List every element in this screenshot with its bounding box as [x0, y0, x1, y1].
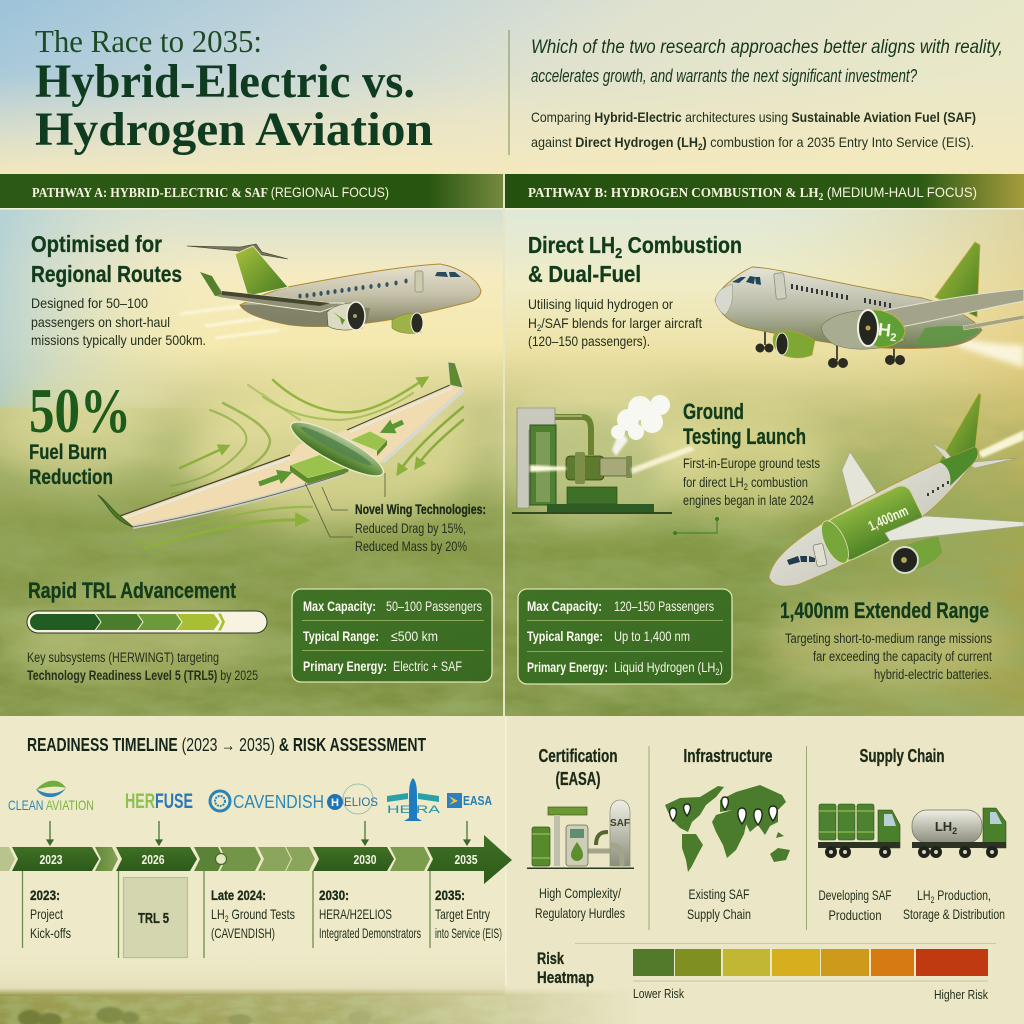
connector: [674, 518, 718, 534]
spec table: pathway B: ): [719, 659, 723, 675]
milestone: 2030: 2030:: [319, 887, 349, 903]
logo: clean aviation: CLEAN AVIATION: [8, 797, 94, 813]
icon: SAF fuel station: [527, 800, 634, 869]
heading: ground testing launch: Testing Launch: [683, 424, 806, 449]
text: ground testing description: engines began in late 2024: [683, 493, 814, 508]
section header: pathway A: [0, 174, 503, 210]
title: [35, 23, 433, 156]
research question: [531, 37, 1003, 86]
text: ground testing description: for direct LH: [683, 475, 757, 490]
icon: SAF barrel truck: [818, 804, 900, 858]
text: regional description: missions typically under 500km.: [31, 332, 206, 348]
heading: direct LH2 combustion: Combustion: [622, 232, 742, 258]
column: certification: (EASA): [556, 769, 601, 789]
heading: optimised for regional routes: Regional Routes: [31, 261, 182, 287]
section header: pathway B: 2: [819, 192, 823, 203]
column: infrastructure: Infrastructure: [684, 746, 772, 766]
text: regional description: Designed for 50–100: [31, 295, 148, 311]
milestone: 2023: [30, 887, 71, 941]
milestone: 2023: Kick-offs: [30, 925, 71, 941]
glow behind text: [0, 375, 1010, 687]
section header: pathway A: PATHWAY A: HYBRID-ELECTRIC & SAF (REGIONAL FOCUS): [32, 184, 389, 201]
illustration: regional aircraft: [180, 244, 481, 338]
logo: clean aviation: [8, 781, 94, 813]
text: hydrogen description: (120–150 passengers).: [528, 333, 650, 349]
spec table: pathway A: Typical Range:: [303, 628, 379, 644]
risk heatmap: Heatmap: [537, 968, 594, 987]
panel background: lower left haze: [0, 716, 505, 1024]
column: supply chain: Supply Chain: [860, 746, 944, 766]
spec table: pathway A: 50–100 Passengers: [386, 598, 482, 614]
illustration: ground test rig: [512, 395, 695, 530]
spec table: pathway B: 120–150 Passengers: [614, 598, 714, 614]
illustration: hydrogen airliner: [715, 242, 1024, 368]
milestone: 2035: 2035:: [435, 887, 465, 903]
stat: 50% fuel burn reduction: Fuel Burn: [29, 441, 107, 464]
landscape texture: [0, 380, 1024, 720]
progress bar: TRL: [27, 611, 267, 633]
timeline chevron bar: 2026: [142, 853, 165, 867]
header description: against Direct Hydrogen (LH: [531, 134, 711, 150]
milestone: 2035: [435, 887, 502, 941]
column: supply chain: 2: [931, 895, 934, 905]
text: hydrogen description: 2: [537, 323, 541, 333]
heading: optimised for regional routes: [31, 231, 182, 287]
column: certification: Certification: [538, 746, 618, 766]
text: hydrogen description: H: [528, 315, 538, 331]
spec table: pathway B: [518, 589, 732, 684]
column: certification: Regulatory Hurdles: [535, 905, 625, 921]
callout: novel wing technologies: Reduced Drag by 15%,: [355, 520, 466, 536]
milestone: TRL 5 box: TRL 5: [138, 910, 169, 927]
logo: h2elios: H: [331, 797, 339, 809]
timeline drop lines: [22, 871, 430, 958]
title: Hybrid-Electric vs.: [35, 55, 415, 108]
text: hydrogen description: /SAF blends for larger aircraft: [541, 315, 702, 331]
stat: 50% fuel burn reduction: Reduction: [29, 466, 113, 489]
heading: direct LH2 combustion: Direct LH: [528, 232, 630, 258]
logo: cavendish: CAVENDISH: [233, 792, 324, 812]
icon: world map with pins: [665, 785, 790, 872]
column: supply chain: [818, 746, 1006, 923]
icon: LH2 tanker truck: 2: [952, 826, 957, 836]
illustration: flying wing with airflow arrows: [98, 362, 486, 554]
column: supply chain: Production,: [934, 887, 991, 903]
logo: hera: [387, 778, 441, 821]
spec table: pathway B: Max Capacity:: [527, 598, 602, 614]
heading: readiness timeline: READINESS TIMELINE (2023 → 2035) & RISK ASSESSMENT: [27, 735, 426, 755]
callout: novel wing technologies: Reduced Mass by 20%: [355, 538, 467, 554]
column: infrastructure: [665, 746, 790, 922]
milestone: TRL 5 box: [124, 878, 188, 958]
text: extended range description: [785, 631, 992, 682]
risk heatmap: Higher Risk: [934, 987, 988, 1002]
timeline chevron bar: [0, 835, 512, 884]
illustration: 1,400nm airliner: 1,400nm: [866, 502, 910, 534]
text: TRL description: Key subsystems (HERWINGT) targeting: [27, 650, 219, 665]
column: certification: [527, 746, 634, 921]
panel: pathway A background: [0, 208, 503, 716]
milestone: late 2024: Late 2024:: [211, 887, 266, 903]
spec table: pathway B: Up to 1,400 nm: [614, 628, 690, 644]
heading: direct LH2 combustion: [528, 232, 742, 287]
spec table: pathway A: [292, 589, 492, 682]
text: ground testing description: combustion: [748, 475, 808, 490]
spec table: pathway B: Primary Energy:: [527, 659, 608, 675]
icon: LH2 tanker truck: LH: [935, 819, 952, 834]
title: Hydrogen Aviation: [35, 103, 433, 156]
text: TRL description: [27, 650, 258, 683]
callout: novel wing technologies: [305, 473, 486, 554]
milestone: late 2024: Ground Tests: [229, 906, 295, 922]
heading: optimised for regional routes: Optimised for: [31, 231, 162, 257]
heading: direct LH2 combustion: 2: [615, 245, 622, 262]
icon: SAF fuel station: SAF: [610, 818, 630, 829]
header description: [531, 109, 976, 152]
milestone: 2035: into Service (EIS): [435, 925, 502, 941]
header description: 2: [698, 142, 702, 152]
milestone: 2023: Project: [30, 906, 63, 922]
milestone: late 2024: [211, 887, 295, 941]
section header: pathway B: PATHWAY B: HYDROGEN COMBUSTION & LH: [528, 186, 839, 201]
panel: risk assessment: [527, 746, 1006, 1002]
milestone: late 2024: (CAVENDISH): [211, 925, 275, 941]
spec table: pathway A: Primary Energy:: [303, 658, 387, 674]
risk heatmap: [537, 944, 996, 1002]
column: supply chain: Developing SAF: [818, 887, 892, 903]
logo: easa: EASA: [463, 793, 492, 808]
text: regional description: [31, 295, 206, 348]
timeline chevron bar: 2035: [454, 853, 478, 867]
spec table: pathway B: Liquid Hydrogen (LH: [614, 659, 742, 675]
panel: pathway B background: [505, 208, 1024, 716]
header divider: [508, 30, 510, 155]
landscape strip: [0, 988, 640, 1024]
milestone: 2030: HERA/H2ELIOS: [319, 906, 392, 922]
column: certification: High Complexity/: [539, 885, 621, 901]
text: regional description: passengers on short-haul: [31, 314, 170, 330]
logo: cavendish: [210, 791, 324, 812]
text: hydrogen description: [528, 296, 702, 349]
callout: novel wing technologies: Novel Wing Technologies:: [355, 501, 486, 517]
illustration: hydrogen airliner: H: [877, 319, 892, 341]
column: supply chain: Production: [828, 907, 882, 923]
header band: [0, 0, 1024, 175]
logo: easa: [447, 793, 492, 808]
risk heatmap: Risk: [537, 949, 564, 968]
spec table: pathway A: ≤500 km: [391, 628, 438, 644]
risk heatmap: Lower Risk: [633, 986, 684, 1001]
spec table: pathway A: Max Capacity:: [303, 598, 376, 614]
heading: direct LH2 combustion: & Dual-Fuel: [528, 261, 641, 287]
spec table: pathway B: Typical Range:: [527, 628, 603, 644]
header description: ): [702, 134, 707, 150]
haze above horizon: [0, 940, 505, 995]
section header: pathway B: [505, 174, 1024, 210]
column: infrastructure: Supply Chain: [687, 906, 751, 922]
text: ground testing description: First-in-Europe ground tests: [683, 456, 820, 471]
icon: LH2 tanker truck: [912, 808, 1006, 858]
title: The Race to 2035:: [35, 23, 262, 59]
stat: 50% fuel burn reduction: 50%: [29, 376, 131, 446]
header description: Comparing Hybrid-Electric architectures using Sustainable Aviation Fuel (SAF): [531, 109, 976, 125]
text: hydrogen description: Utilising liquid hydrogen or: [528, 296, 673, 312]
spec table: pathway B: 2: [715, 667, 719, 677]
milestone: 2023: 2023:: [30, 887, 60, 903]
logo: herfuse: HERFUSE: [125, 790, 193, 813]
timeline chevron bar: 2023: [40, 853, 63, 867]
heading: rapid TRL advancement: Rapid TRL Advancement: [28, 578, 237, 603]
milestone: 2030: Integrated Demonstrators: [319, 925, 421, 941]
header description: combustion for a 2035 Entry Into Service (EIS).: [711, 134, 1003, 150]
text: ground testing description: 2: [744, 482, 748, 492]
milestone: 2035: Target Entry: [435, 906, 490, 922]
column: infrastructure: Existing SAF: [688, 886, 750, 902]
logo: h2elios: ELIOS: [344, 795, 378, 809]
timeline milestone arrows: [47, 821, 470, 845]
logo: hera: HE RA: [387, 804, 441, 816]
illustration: 1,400nm airliner: [769, 393, 1024, 586]
heading: ground testing launch: Ground: [683, 399, 744, 424]
illustration: hydrogen airliner: 2: [890, 332, 897, 344]
panel: readiness timeline: [0, 735, 512, 958]
section header: pathway B: (MEDIUM-HAUL FOCUS): [823, 184, 977, 200]
text: extended range description: hybrid-electric batteries.: [874, 667, 992, 682]
column: supply chain: LH: [917, 887, 935, 903]
panel background: lower right: [505, 716, 1024, 1024]
heading: ground testing launch: [683, 399, 806, 449]
stat: 50% fuel burn reduction: [29, 376, 131, 489]
logo: h2elios: [327, 784, 378, 814]
milestone: late 2024: 2: [225, 914, 229, 924]
text: ground testing description: [683, 456, 820, 508]
spec table: pathway A: Electric + SAF: [393, 658, 462, 674]
milestone: late 2024: LH: [211, 906, 229, 922]
text: TRL description: Technology Readiness Level 5 (TRL5) by 2025: [27, 668, 258, 683]
milestone: 2030: [319, 887, 421, 941]
timeline chevron bar: 2030: [354, 853, 377, 867]
